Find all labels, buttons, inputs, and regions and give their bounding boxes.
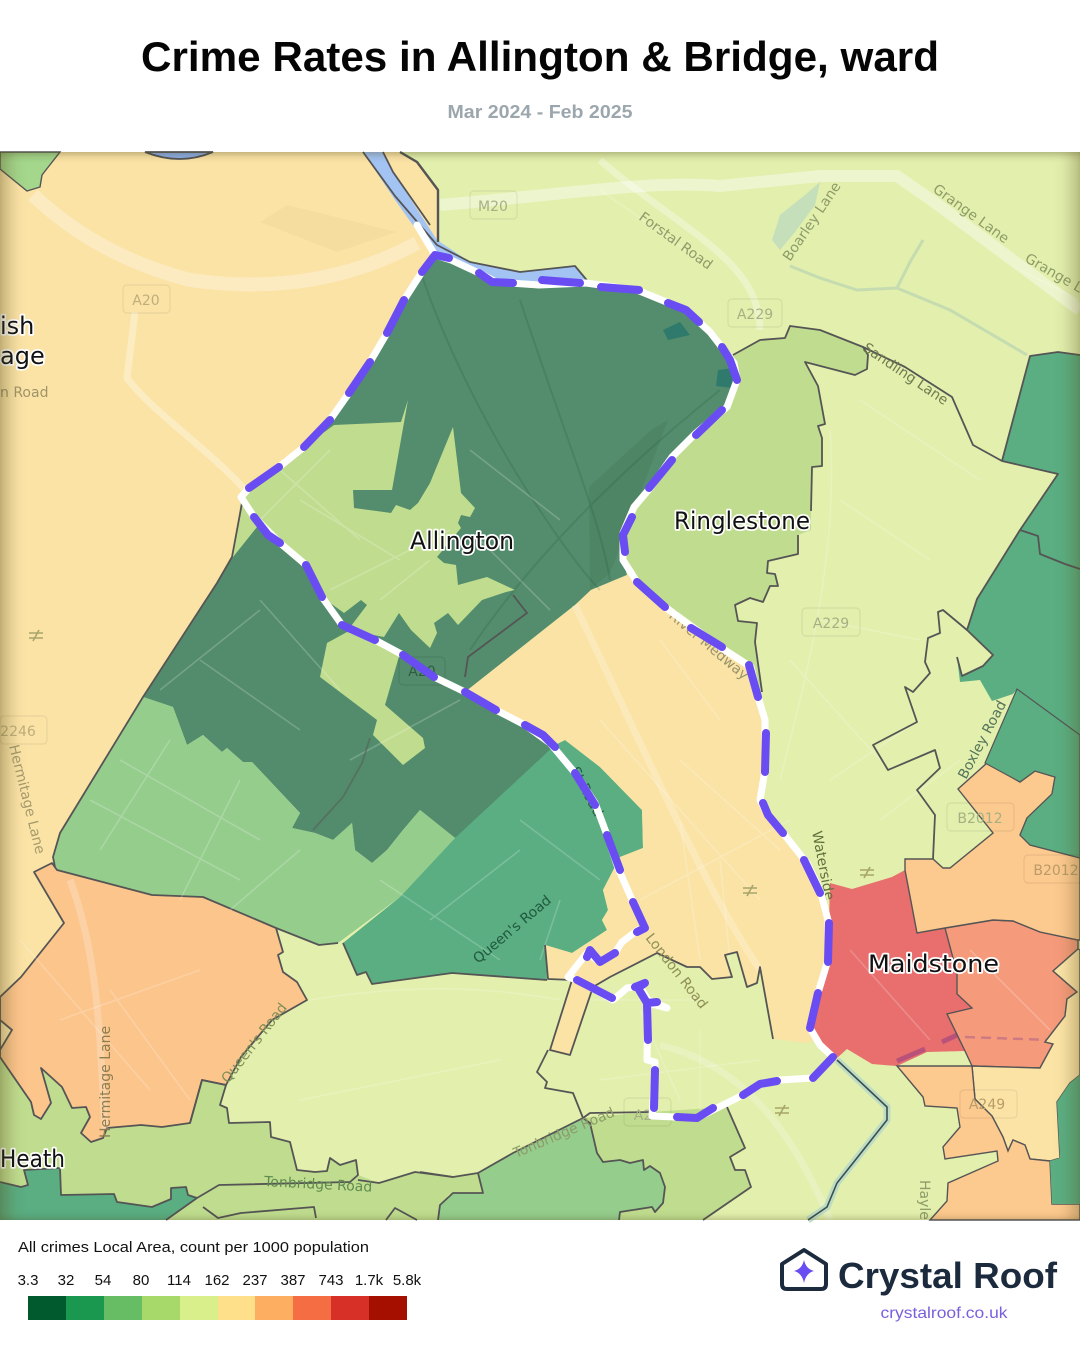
region: green bottom right — [1050, 1075, 1080, 1204]
region: peach darker patches — [260, 205, 397, 252]
region: dark green south-west of road — [143, 527, 555, 863]
place labels: Ringlestone — [674, 507, 810, 535]
region: orange south of maidstone — [897, 1066, 1080, 1220]
road labels and shields: Boarley Lane — [780, 179, 845, 264]
road labels and shields: Tonbridge Road — [263, 1174, 373, 1196]
road labels and shields: A229 — [737, 307, 773, 323]
region: mid green heath — [53, 697, 455, 945]
road labels and shields: 2246 — [0, 724, 36, 740]
legend scale values: 54 — [95, 1272, 111, 1289]
road labels and shields: St Road — [566, 764, 606, 820]
road labels and shields: A229 — [813, 616, 849, 632]
title: Crime Rates in Allington & Bridge, ward — [141, 33, 939, 80]
legend scale values: 32 — [58, 1272, 74, 1289]
legend scale values: 5.8k — [393, 1272, 422, 1289]
region: bottom left teal — [0, 1168, 197, 1220]
road labels and shields: n Road — [0, 385, 48, 401]
icon: house with star — [782, 1250, 826, 1289]
region: north-west peach area — [0, 152, 438, 997]
legend scale values: 162 — [204, 1272, 230, 1289]
road labels and shields: A2 — [634, 1108, 652, 1124]
road labels and shields: B2012 — [1033, 863, 1079, 879]
region: small peach notch on left edge — [0, 1020, 12, 1050]
region: allington ponds — [663, 322, 733, 388]
region: light green sliver west — [233, 500, 258, 557]
region: allington light green — [241, 400, 515, 648]
region: queen's road green — [343, 740, 643, 984]
road labels and shields: A249 — [969, 1097, 1005, 1113]
place labels: Maidstone — [868, 950, 999, 978]
road labels and shields: Queen's Road — [219, 1000, 291, 1086]
region: green east — [957, 352, 1080, 735]
legend scale values: 114 — [167, 1272, 191, 1289]
place labels: Heath — [0, 1145, 65, 1173]
legend — [18, 1239, 422, 1320]
logo url: crystalroof.co.uk — [880, 1305, 1009, 1322]
road labels and shields: A20 — [408, 664, 436, 680]
legend scale values: 237 — [242, 1272, 268, 1289]
legend scale values: 387 — [280, 1272, 306, 1289]
logo wordmark: Crystal Roof — [838, 1255, 1058, 1296]
region: north-west corner green — [0, 152, 60, 191]
road labels and shields: A20 — [132, 293, 160, 309]
railway station symbols — [29, 630, 874, 1116]
road labels and shields: Queen's Road — [470, 893, 555, 967]
lesser stream and ponds, north east — [772, 182, 1027, 355]
region: maidstone red — [810, 870, 972, 1066]
region: river medway — [363, 152, 590, 284]
road labels and shields: Hayle — [916, 1180, 932, 1220]
roads — [20, 160, 1080, 1220]
subtitle: date range: Mar 2024 - Feb 2025 — [448, 102, 632, 122]
region: allington dark green — [241, 255, 737, 692]
road labels and shields: M20 — [478, 199, 508, 215]
legend title: All crimes Local Area, count per 1000 population — [18, 1239, 369, 1256]
legend scale values: 743 — [318, 1272, 344, 1289]
road labels and shields: Sandling Lane — [860, 340, 951, 409]
road labels and shields: River Medway — [665, 608, 751, 683]
place labels — [0, 312, 999, 1173]
road labels and shields: Waterside — [808, 830, 837, 902]
road labels and shields: London Road — [642, 931, 710, 1012]
region: green north-east of maidstone — [985, 689, 1080, 858]
legend colour bar — [28, 1296, 407, 1320]
legend scale values: 3.3 — [18, 1272, 38, 1289]
railway dashes in salmon — [965, 1037, 1050, 1040]
region: ringlestone green — [623, 326, 868, 692]
road labels and shields: Forstal Road — [636, 209, 715, 273]
region: tonbridge road light green — [583, 1107, 751, 1220]
road labels and shields: Hermitage Lane — [98, 1026, 114, 1138]
place labels: Allington — [410, 527, 514, 555]
legend scale values: 80 — [133, 1272, 149, 1289]
ward boundary: white underlay — [241, 225, 833, 1118]
road labels and shields: B2012 — [957, 811, 1003, 827]
region boundary outlines — [0, 152, 1080, 1220]
place labels: ish — [0, 312, 34, 340]
region: orange north-east of maidstone — [905, 763, 1080, 940]
ward boundary: purple dashes — [249, 255, 833, 1118]
legend scale values — [18, 1272, 422, 1289]
region: salmon east of maidstone — [945, 920, 1078, 1068]
region: tonbridge road mid green — [438, 1118, 665, 1220]
road labels and shields: Tonbridge Road — [510, 1105, 617, 1162]
region: allington darker field — [589, 420, 668, 590]
road labels and shields: Grange Lane — [930, 181, 1012, 247]
logo: crystal roof — [782, 1250, 1058, 1322]
region: river top-left — [145, 152, 213, 159]
region: peach south-east — [972, 949, 1080, 1161]
railway band in maidstone — [897, 1035, 957, 1061]
region: south-west orange — [0, 863, 307, 1142]
road labels and shields: Hermitage Lane — [5, 743, 48, 856]
region: central peach — [465, 575, 828, 1055]
road labels and shields — [0, 179, 1080, 1220]
legend scale values: 1.7k — [355, 1272, 384, 1289]
road labels and shields: Boxley Road — [955, 698, 1010, 782]
choropleth map — [0, 152, 1080, 1220]
place labels: age — [0, 342, 45, 370]
region: south-west light green — [0, 1057, 483, 1220]
region: small light green patch — [320, 632, 425, 765]
